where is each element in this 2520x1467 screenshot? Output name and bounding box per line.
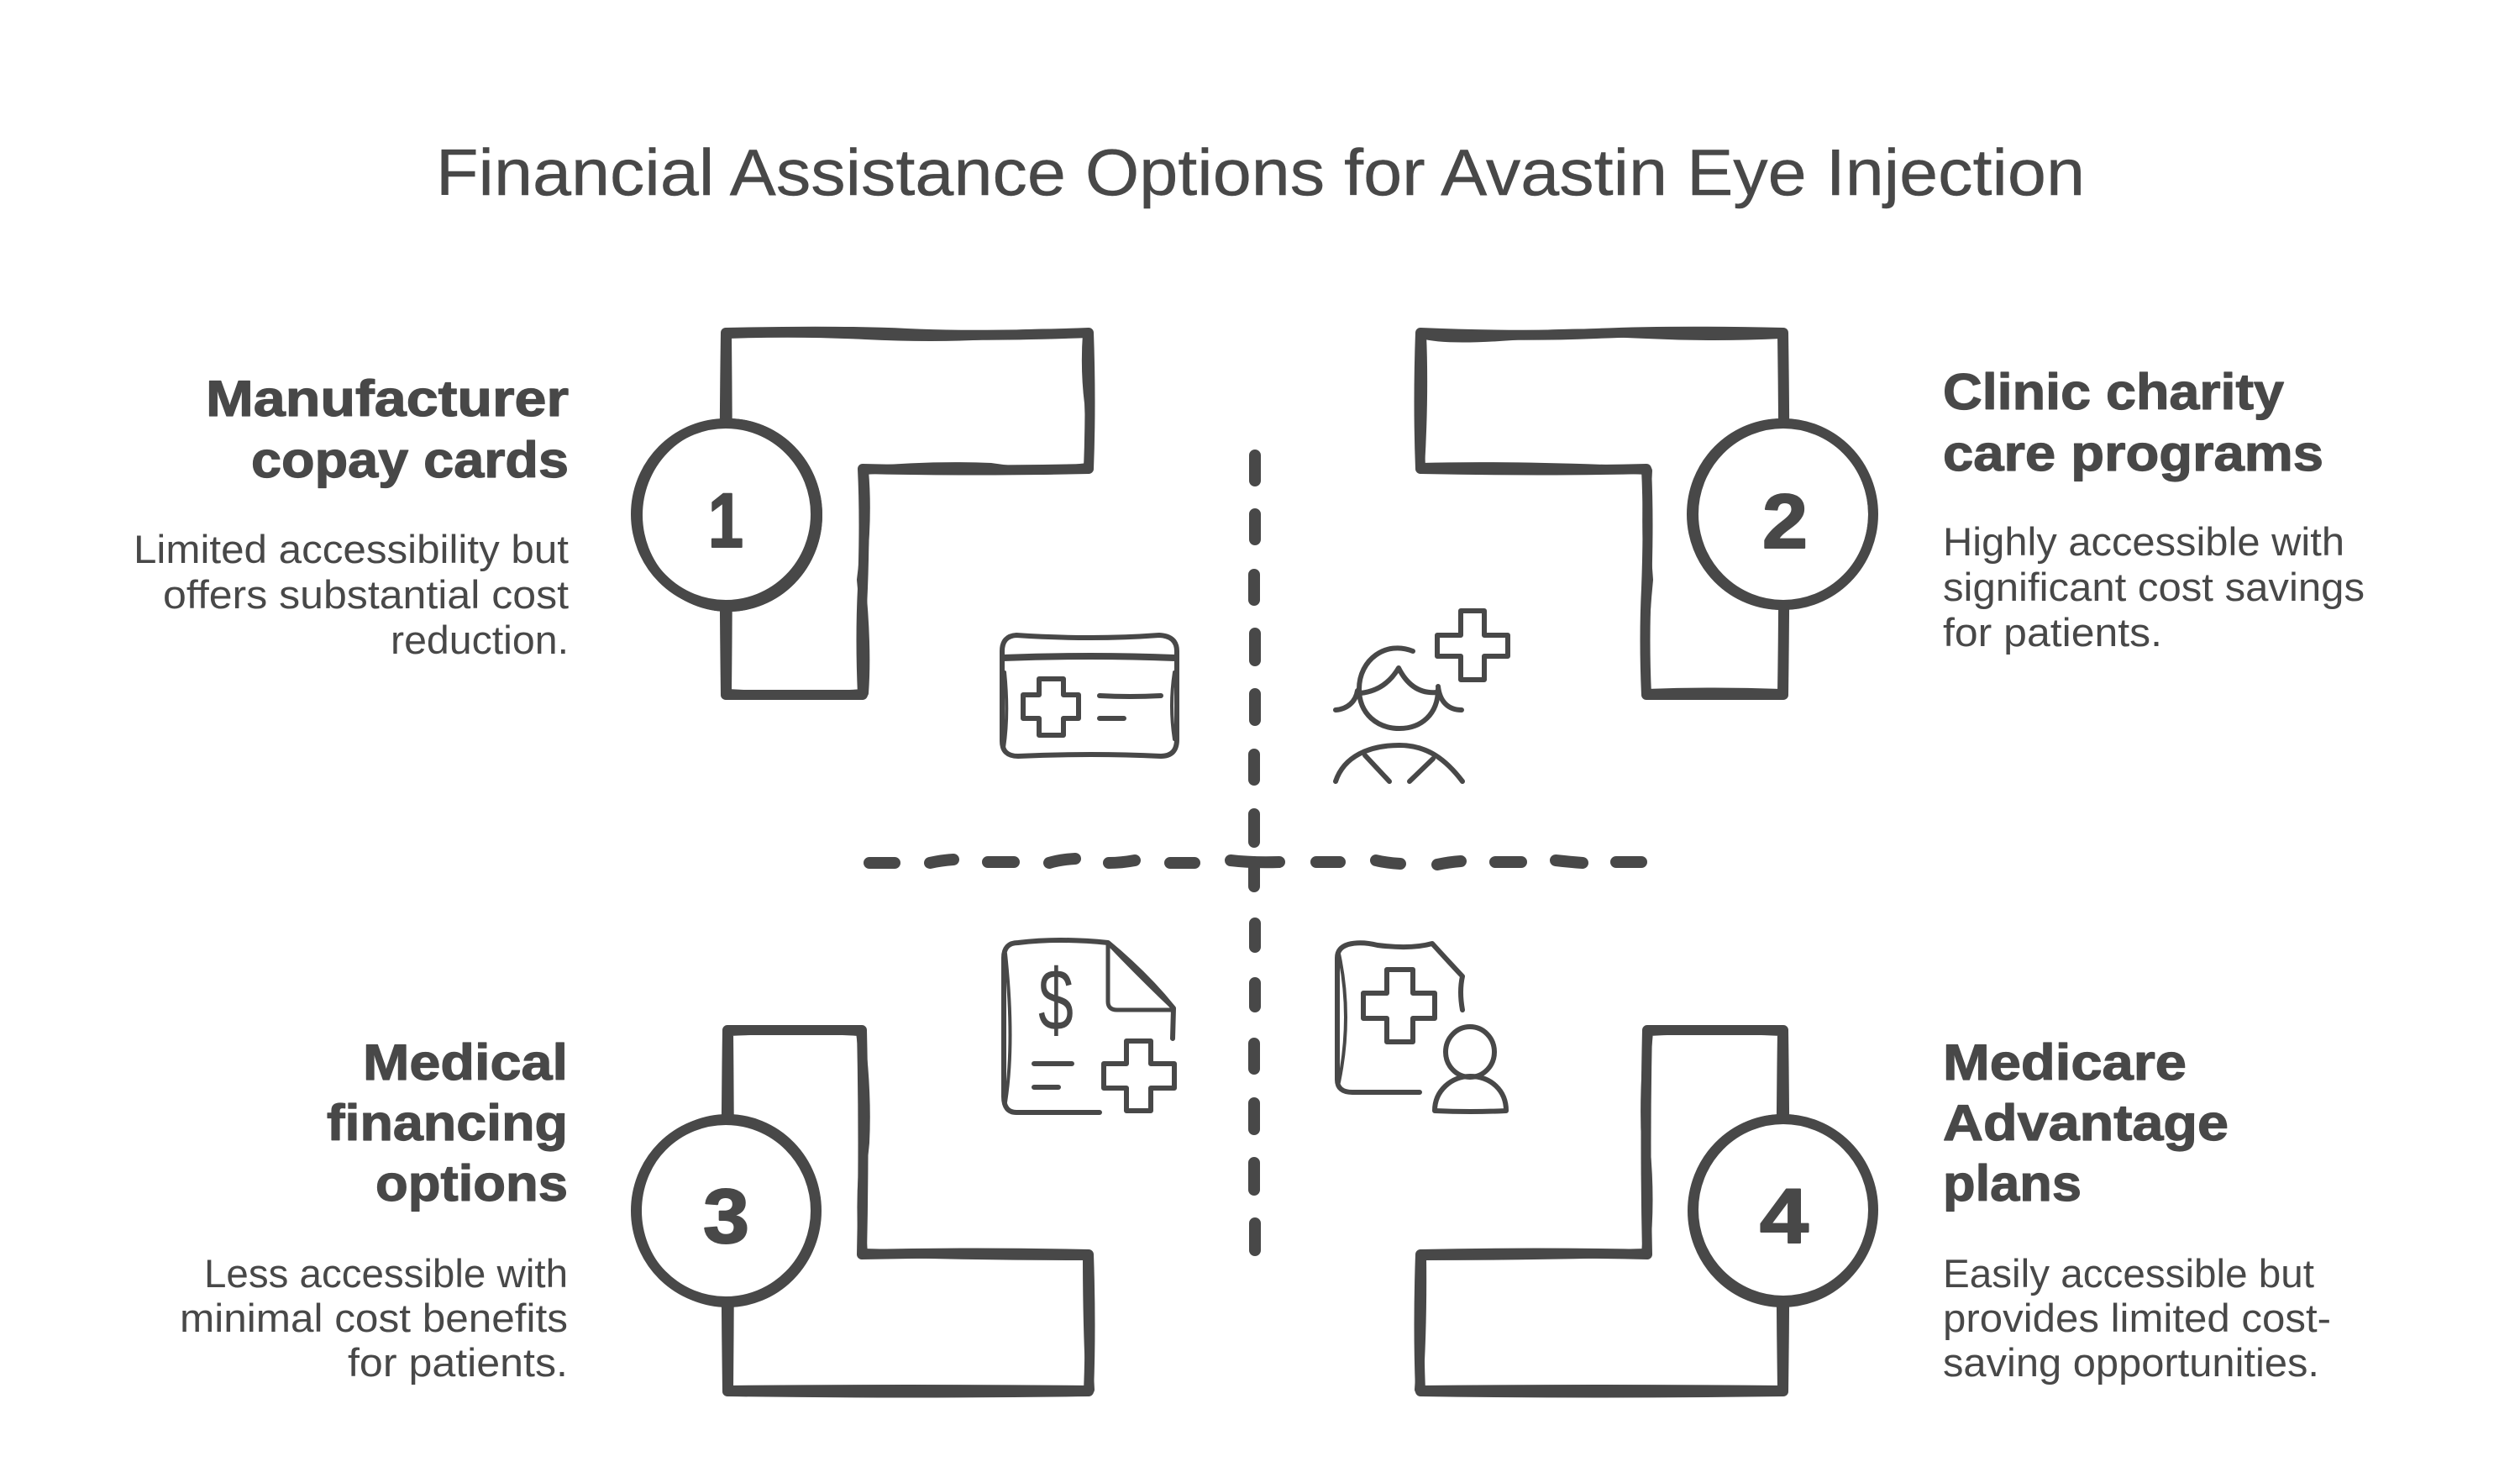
- description 3: Less accessible with: [204, 1251, 568, 1296]
- heading 2: Clinic charity: [1943, 364, 2285, 420]
- icon: insurance card: [1002, 635, 1177, 756]
- heading 3: Medical: [363, 1034, 568, 1091]
- number 3: 3: [703, 1174, 749, 1259]
- number 1: 1: [708, 478, 743, 564]
- description 1: [134, 527, 569, 662]
- title: Financial Assistance Options for Avastin Eye Injection: [436, 135, 2085, 209]
- heading 3: [327, 1034, 568, 1212]
- heading 4: Advantage: [1943, 1095, 2229, 1151]
- description 3: for patients.: [348, 1340, 568, 1385]
- description 1: Limited accessibility but: [134, 527, 569, 571]
- description 4: saving opportunities.: [1943, 1340, 2319, 1385]
- description 2: [1943, 519, 2365, 655]
- heading 4: plans: [1943, 1155, 2082, 1212]
- number circle 4: [1692, 1118, 1873, 1303]
- heading 2: [1943, 364, 2323, 481]
- description 4: provides limited cost-: [1943, 1296, 2331, 1340]
- number 2: 2: [1762, 479, 1808, 565]
- heading 3: options: [375, 1155, 568, 1212]
- heading 4: Medicare: [1943, 1034, 2187, 1091]
- icon: bill with dollar sign and plus: [1004, 940, 1174, 1112]
- heading 3: financing: [327, 1095, 568, 1151]
- description 2: for patients.: [1943, 610, 2162, 655]
- description 4: [1943, 1251, 2331, 1385]
- number 4: 4: [1760, 1174, 1809, 1259]
- panel 2: clinic charity care programs: [1420, 332, 2365, 695]
- panel 4: medicare advantage plans: [1419, 1030, 2331, 1393]
- icon: medical document with person: [1337, 943, 1506, 1112]
- heading 2: care programs: [1943, 425, 2323, 481]
- description 4: Easily accessible but: [1943, 1251, 2314, 1296]
- description 1: reduction.: [391, 618, 569, 662]
- number circle 3: [636, 1118, 817, 1303]
- description 2: Highly accessible with: [1943, 519, 2344, 564]
- heading 1: [206, 371, 569, 488]
- description 3: [180, 1251, 568, 1385]
- number circle 2: [1691, 423, 1873, 606]
- description 3: minimal cost benefits: [180, 1296, 568, 1340]
- heading 1: copay cards: [251, 432, 569, 488]
- horizontal dashed divider: [869, 859, 1641, 865]
- plus sign: [1437, 611, 1508, 680]
- description 2: significant cost savings: [1943, 565, 2365, 609]
- icon: nurse with plus: [1336, 611, 1508, 781]
- heading 1: Manufacturer: [206, 371, 569, 427]
- number circle 1: [636, 423, 818, 607]
- bracket shape 1: [724, 332, 1090, 696]
- bracket shape 2: [1420, 332, 1784, 695]
- icon: bill with dollar sign and plus: $: [1038, 952, 1074, 1049]
- heading 4: [1943, 1034, 2229, 1212]
- panel 1: manufacturer copay cards: [134, 332, 1090, 696]
- bracket shape 3: [726, 1030, 1090, 1393]
- panel 3: medical financing options: [180, 1030, 1090, 1393]
- bracket shape 4: [1419, 1030, 1784, 1393]
- description 1: offers substantial cost: [163, 572, 569, 617]
- vertical dashed divider: [1254, 455, 1255, 1250]
